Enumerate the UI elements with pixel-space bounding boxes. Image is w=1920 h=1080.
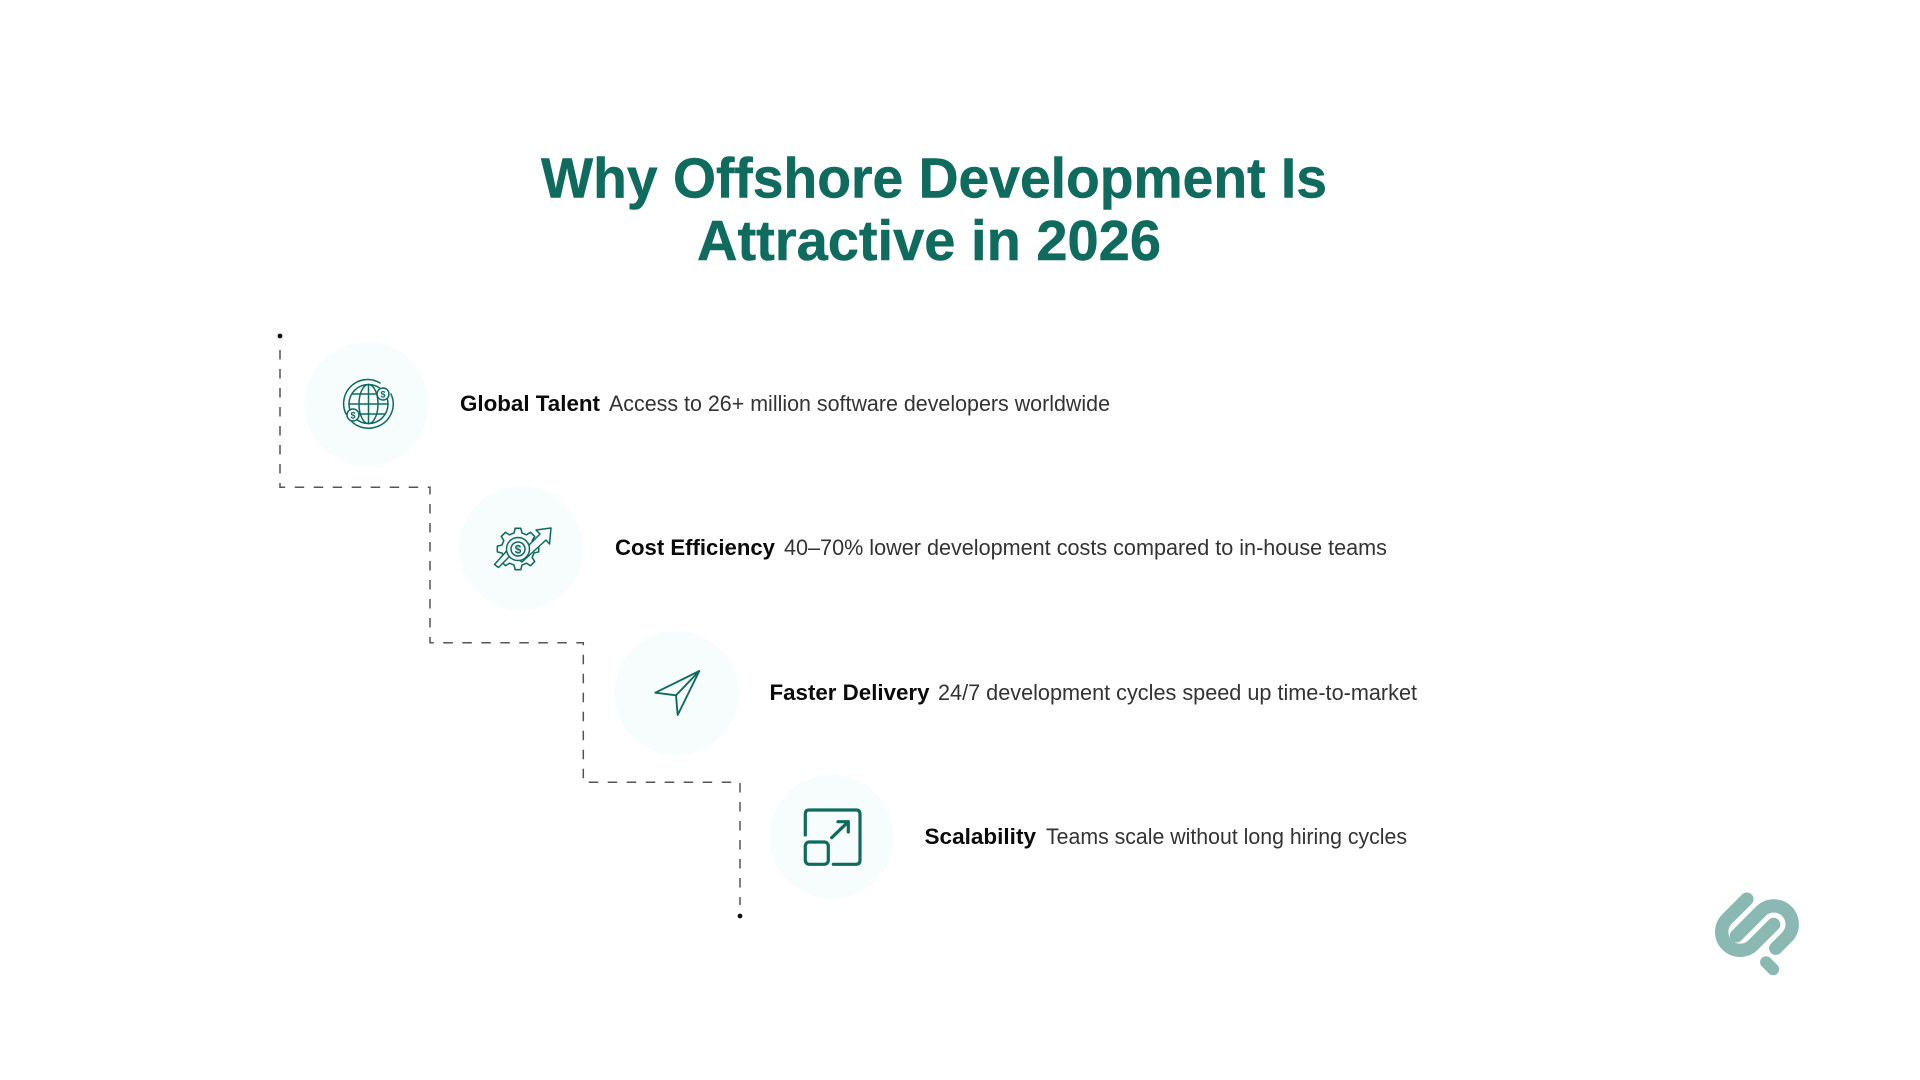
icon: gear with rising arrow	[459, 486, 583, 610]
icon: gear with rising arrow: $	[515, 542, 522, 556]
title: Why Offshore Development Is	[541, 146, 1327, 210]
icon: paper plane	[614, 631, 738, 755]
text: scalability: Teams scale without long hiring cycles	[1046, 824, 1407, 849]
text: global talent: Global Talent	[460, 391, 601, 416]
text: global talent: Access to 26+ million software developers worldwide	[609, 391, 1110, 416]
icon: scale square with arrow	[770, 775, 894, 899]
icon: globe with coins: $	[380, 390, 386, 400]
step 1: global talent	[304, 342, 1110, 466]
title: Attractive in 2026	[697, 209, 1161, 273]
text: faster delivery: Faster Delivery	[770, 680, 930, 705]
text: cost efficiency: 40–70% lower development costs compared to in-house teams	[784, 535, 1387, 560]
step 4: scalability	[770, 775, 1407, 899]
text: scalability: Scalability	[924, 824, 1037, 849]
icon: globe with coins	[304, 342, 428, 466]
text: faster delivery: 24/7 development cycles speed up time-to-market	[938, 680, 1417, 705]
title	[541, 146, 1327, 273]
step 3: faster delivery	[614, 631, 1417, 755]
logo	[1722, 899, 1792, 969]
step 2: cost efficiency	[459, 486, 1387, 610]
text: cost efficiency: Cost Efficiency	[615, 535, 776, 560]
dashed staircase connector	[278, 334, 742, 918]
icon: globe with coins: $	[350, 410, 356, 420]
